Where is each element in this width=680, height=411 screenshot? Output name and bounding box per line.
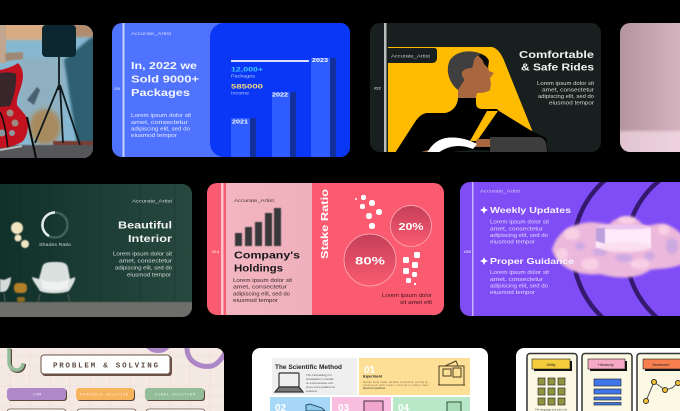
list item: weekly updates: Lorem ipsum dolor sit	[490, 220, 550, 226]
list item: weekly updates: eiusmod tempor	[490, 240, 535, 246]
step 02	[270, 397, 330, 411]
heading	[131, 61, 199, 99]
panel: pink studio photo	[620, 23, 680, 152]
body text	[233, 278, 293, 304]
label: author: Accurate_Artist	[234, 198, 275, 203]
heading: Comfortable	[519, 50, 595, 61]
stat: packages	[231, 66, 263, 78]
body text: on a best-answer and	[306, 381, 333, 385]
arcs	[572, 182, 661, 316]
caption	[382, 293, 432, 304]
caption: sit amet elit	[400, 300, 433, 306]
decorative hook	[10, 349, 24, 371]
chip: final solution	[145, 388, 205, 401]
panel: the scientific method	[252, 348, 488, 411]
panel: weekly updates	[460, 182, 680, 316]
list item: proper guidance	[480, 256, 574, 296]
chip: final solution: FINAL SOLUTION	[155, 394, 195, 398]
chip: possible solution	[76, 388, 135, 401]
chip: item	[7, 388, 67, 401]
column: grid chart: Utility	[547, 363, 556, 367]
column: line chart: Movement	[653, 363, 669, 367]
chart: 20% circle	[390, 206, 432, 246]
panel: guitar photo card	[0, 25, 93, 158]
answer boxes	[7, 409, 205, 411]
heading: Packages	[131, 88, 191, 99]
heading: The Scientific Method	[275, 364, 342, 371]
step 01: Design tests under variable conditions, setting up	[363, 381, 429, 384]
column: grid chart	[527, 354, 577, 411]
heading: stake ratio: Stake Ratio	[319, 189, 331, 259]
column: line chart	[637, 354, 680, 411]
body text: eiusmod tempor	[549, 100, 594, 106]
panel: problem and solving	[0, 346, 226, 411]
body text	[537, 81, 595, 106]
illustration: cloud and podium	[552, 216, 680, 277]
heading: Holdings	[234, 264, 283, 274]
panel: beautiful interior	[0, 184, 192, 317]
step 01: experiment with proper controls to gather data	[363, 384, 429, 387]
body text: adipiscing elit, sed do	[538, 94, 594, 100]
chart: 80% circle: 80%	[355, 256, 385, 268]
stat: packages: 12,000+	[231, 66, 263, 74]
icon: whiteboard	[438, 361, 465, 385]
page number: /02	[374, 86, 381, 90]
list item: proper guidance: Proper Guidance	[490, 256, 574, 266]
panel: chart types	[516, 348, 680, 411]
bar chart	[235, 208, 281, 246]
body text: Lorem ipsum dolor sit	[131, 113, 192, 119]
heading	[520, 50, 594, 70]
body text: amet, consectetur	[131, 120, 188, 126]
body text	[113, 252, 173, 278]
step 01: Experiment	[363, 374, 383, 378]
body text: eiusmod tempor	[131, 133, 177, 139]
side table	[14, 283, 27, 302]
body text: adipiscing elit, sed do	[115, 266, 172, 272]
stat: income	[231, 84, 263, 94]
decorative loops	[148, 346, 226, 366]
body text: The methodology for	[306, 373, 332, 377]
body text: evidence	[306, 389, 318, 393]
step 01	[359, 358, 470, 395]
bar chart: 2021	[232, 120, 248, 126]
lamps	[11, 222, 29, 248]
body text: adipiscing elit, sed do	[233, 292, 290, 298]
chart: 20% circle: 20%	[398, 222, 424, 233]
page number: /20	[114, 87, 120, 91]
heading	[118, 221, 172, 242]
heading: Company's	[234, 250, 301, 262]
icon: laptop	[275, 373, 303, 392]
bar chart: 2022	[272, 92, 288, 98]
list item: weekly updates	[480, 205, 571, 246]
label: author: Accurate_Artist	[480, 188, 521, 194]
page number: /06	[464, 250, 471, 254]
bar chart	[231, 58, 336, 157]
heading: Interior	[128, 234, 172, 245]
decorative dots	[355, 195, 420, 285]
chip: possible solution: POSSIBLE SOLUTION	[80, 394, 128, 398]
body text: prove one's justified via	[306, 385, 335, 389]
step 01: about the hypothesis	[363, 387, 386, 390]
icon: red guitar	[0, 25, 36, 158]
body text: Lorem ipsum dolor sit	[537, 81, 595, 87]
label: author tag: Accurate_Artist	[391, 54, 431, 58]
body text: amet, consectetur	[119, 258, 172, 264]
list item: proper guidance: amet, consectetur	[490, 277, 543, 283]
body text: amet, consectetur	[542, 88, 594, 94]
column: hierarchy bars: Hierarchy	[598, 363, 614, 367]
stat: income: 585000	[231, 84, 264, 90]
list item: weekly updates: Weekly Updates	[490, 205, 571, 215]
body text: Lorem ipsum dolor sit	[113, 252, 173, 258]
list item: weekly updates: amet, consectetur	[490, 226, 543, 232]
label: author tag	[388, 48, 437, 63]
heading: Sold 9000+	[131, 74, 199, 86]
list item: proper guidance: eiusmod tempor	[490, 290, 535, 296]
list item: proper guidance: Lorem ipsum dolor sit	[490, 270, 550, 276]
list item: weekly updates: adipiscing elit, sed do	[490, 233, 548, 239]
body text: Lorem ipsum dolor sit	[233, 278, 293, 284]
step 03	[332, 397, 391, 411]
heading: In, 2022 we	[131, 61, 198, 72]
step 04	[393, 397, 470, 411]
heading: & Safe Rides	[521, 62, 595, 74]
heading	[234, 252, 300, 274]
panel: packages sold	[112, 23, 360, 157]
heading: Beautiful	[118, 220, 172, 232]
body text: adipiscing elit, sed do	[131, 126, 190, 132]
stat: packages: Packages	[231, 74, 256, 78]
body text	[306, 373, 335, 393]
body text: investigation to decide	[306, 377, 334, 381]
list item: proper guidance: adipiscing elit, sed do	[490, 284, 548, 290]
body text: amet, consectetur	[233, 284, 287, 290]
bar chart: 2023	[312, 58, 328, 64]
title plate	[41, 355, 172, 376]
body text	[131, 113, 192, 139]
panel: company's holdings and stake ratio	[207, 183, 444, 315]
title plate: PROBLEM & SOLVING	[53, 362, 158, 370]
chart: shades ratio ring: Shades Ratio	[39, 242, 72, 247]
body text: eiusmod tempor	[127, 272, 171, 278]
caption: Lorem ipsum dolor	[382, 293, 432, 299]
chart: shades ratio ring	[39, 212, 72, 247]
label: author: Accurate_Artist	[132, 198, 173, 204]
page number: /04	[212, 250, 219, 254]
column: hierarchy bars	[582, 354, 632, 411]
icon: speaker on stand	[35, 25, 80, 145]
body text: eiusmod tempor	[233, 298, 278, 304]
illustration: armchairs	[0, 262, 75, 302]
chip: item: ITEM	[33, 394, 41, 398]
step 01: 01	[364, 365, 376, 376]
illustration: driver	[388, 47, 548, 152]
stat: income: Income	[231, 90, 250, 96]
panel: safe rides	[370, 23, 601, 152]
chart: 80% circle	[344, 234, 396, 286]
label: author: Accurate_Artist	[131, 31, 172, 36]
